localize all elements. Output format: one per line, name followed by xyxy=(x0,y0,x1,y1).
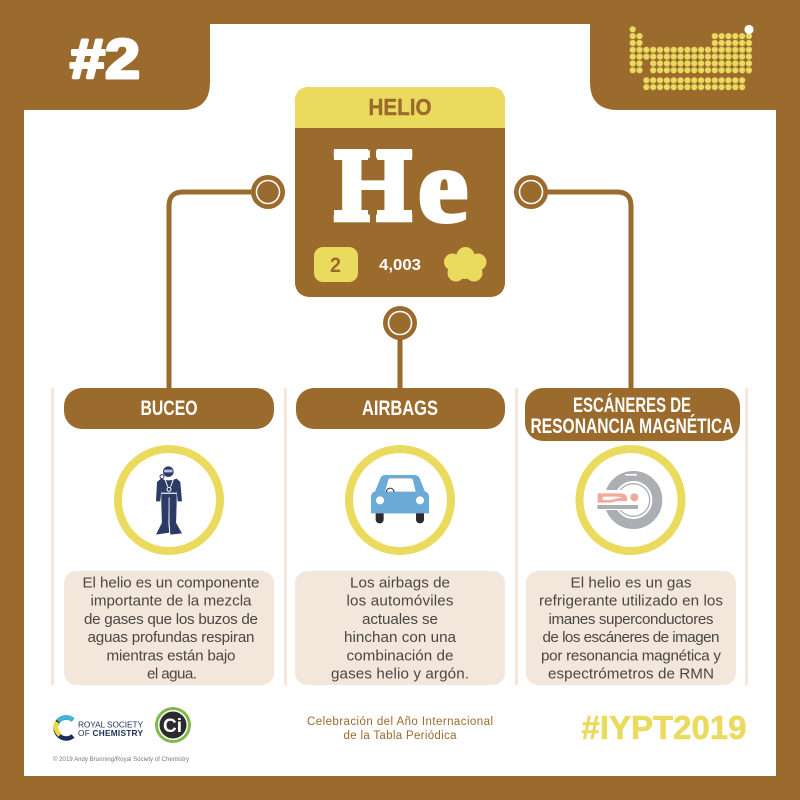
description box: aguas profundas respiran xyxy=(88,629,254,646)
description box: importante de la mezcla xyxy=(90,593,252,610)
icon: diver xyxy=(118,449,220,551)
column separators xyxy=(51,388,748,685)
description box xyxy=(64,571,274,685)
copyright: © 2019 Andy Brunning/Royal Society of Chemistry xyxy=(53,756,189,763)
description box: de gases que los buzos de xyxy=(84,611,258,628)
logo: Royal Society of Chemistry: ROYAL SOCIETY xyxy=(78,720,143,730)
description box xyxy=(526,571,736,685)
element name: HELIO xyxy=(368,94,432,120)
description box: actuales se xyxy=(362,611,438,628)
badge number: #2 xyxy=(70,27,140,90)
atomic mass: 4,003 xyxy=(379,257,421,274)
element symbol: e xyxy=(418,129,468,244)
campaign caption: Celebración del Año Internacional xyxy=(307,716,493,728)
atomic number xyxy=(314,247,358,282)
panel: buceo xyxy=(64,388,274,685)
heading: buceo: BUCEO xyxy=(140,397,198,420)
heading: airbags: AIRBAGS xyxy=(362,397,438,420)
description box: gases helio y argón. xyxy=(331,666,469,682)
heading: buceo xyxy=(64,388,274,429)
element card: helium xyxy=(295,87,505,297)
description box: los automóviles xyxy=(346,593,454,610)
heading: airbags xyxy=(296,388,505,429)
heading: escaneres: RESONANCIA MAGNÉTICA xyxy=(530,415,734,438)
icon: periodic table xyxy=(629,25,754,91)
element symbol xyxy=(334,128,468,244)
description box: por resonancia magnética y xyxy=(541,647,721,664)
description box: El helio es un gas xyxy=(570,574,692,592)
logo: Compound Interest xyxy=(155,707,191,743)
description box: el agua. xyxy=(147,666,197,682)
connector: left xyxy=(169,175,285,388)
panel: airbags xyxy=(295,388,505,685)
logo: Compound Interest: Ci xyxy=(163,716,182,737)
icon: gas cloud xyxy=(444,247,486,282)
description box: Los airbags de xyxy=(350,574,450,592)
connector: right xyxy=(514,175,631,388)
panel: escaneres xyxy=(525,388,740,685)
connector: centre xyxy=(383,306,417,388)
description box: de los escáneres de imagen xyxy=(542,629,720,646)
logo: Royal Society of Chemistry: OF CHEMISTRY xyxy=(78,728,143,738)
description box: El helio es un componente xyxy=(82,574,260,592)
heading: escaneres xyxy=(525,388,740,441)
description box: espectrómetros de RMN xyxy=(548,666,714,682)
logo: Royal Society of Chemistry xyxy=(56,717,143,738)
atomic number: 2 xyxy=(330,254,341,277)
description box: mientras están bajo xyxy=(106,647,236,664)
icon: car xyxy=(349,449,451,551)
description box: imanes superconductores xyxy=(548,611,714,628)
description box: refrigerante utilizado en los xyxy=(539,593,723,610)
campaign caption xyxy=(307,716,493,742)
hashtag: #IYPT2019 xyxy=(582,709,746,746)
element symbol: H xyxy=(334,128,412,243)
description box: hinchan con una xyxy=(344,629,457,646)
description box xyxy=(295,571,505,685)
heading: escaneres: ESCÁNERES DE xyxy=(573,394,691,417)
description box: combinación de xyxy=(346,647,454,664)
icon: MRI scanner xyxy=(580,449,682,551)
campaign caption: de la Tabla Periódica xyxy=(344,730,457,742)
